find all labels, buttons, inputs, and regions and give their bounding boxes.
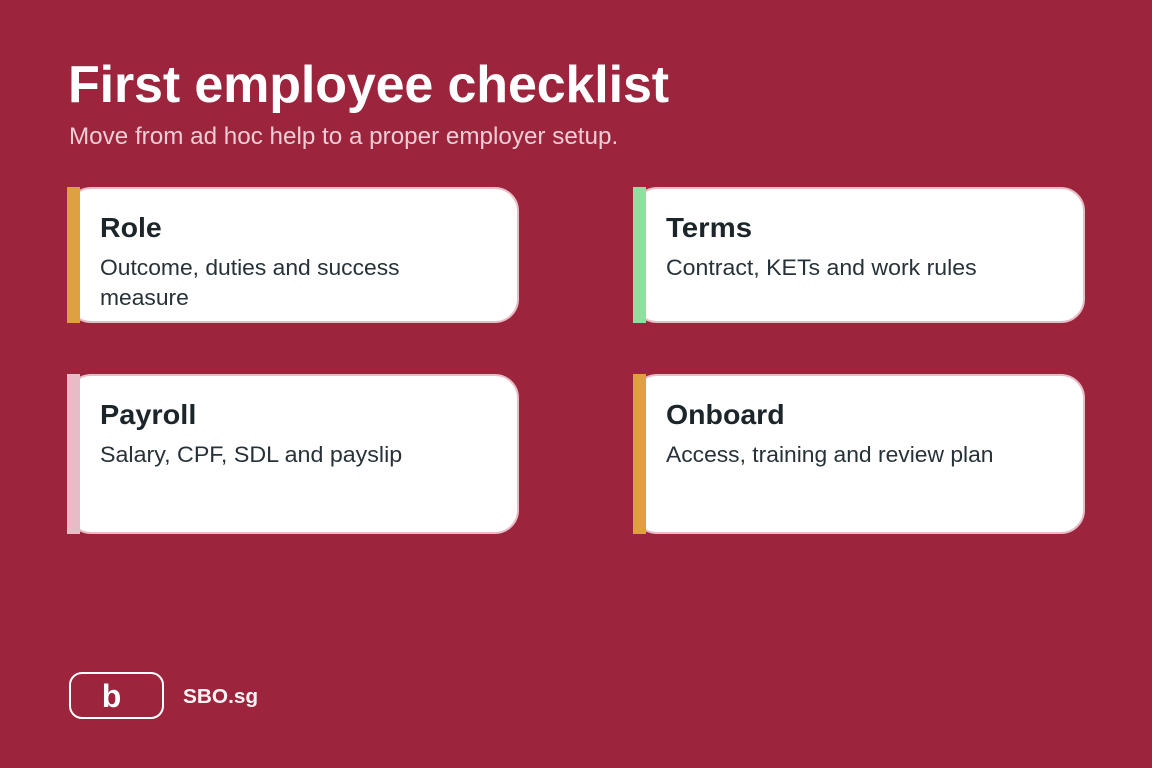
panel: payroll — [67, 374, 519, 534]
subtitle: Move from ad hoc help to a proper employer setup. — [69, 123, 618, 150]
text: terms: Contract, KETs and work rules — [666, 255, 977, 280]
heading: onboard: Onboard — [666, 399, 785, 430]
heading: terms: Terms — [666, 212, 752, 243]
panel: role — [67, 187, 519, 323]
title: First employee checklist — [68, 56, 669, 114]
heading: payroll: Payroll — [100, 399, 196, 430]
panel: terms — [633, 187, 1085, 323]
text: role: Outcome, duties and success measure — [100, 255, 400, 310]
text: onboard: Access, training and review plan — [666, 442, 993, 467]
text: payroll: Salary, CPF, SDL and payslip — [100, 442, 402, 467]
panel: onboard — [633, 374, 1085, 534]
brand name: SBO.sg — [183, 686, 258, 708]
logo badge — [69, 672, 164, 719]
heading: role: Role — [100, 212, 162, 243]
logo badge: b — [102, 678, 121, 714]
